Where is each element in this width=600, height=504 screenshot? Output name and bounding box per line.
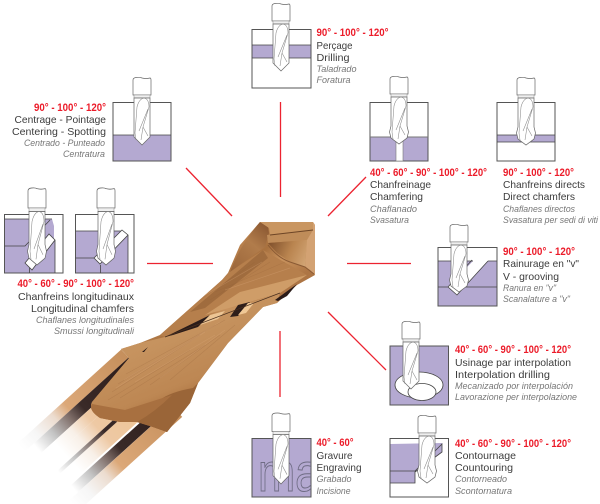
- flute slots: [165, 315, 210, 337]
- longitudinal chamfers text: [18, 278, 135, 337]
- panel: engraving: [252, 413, 362, 503]
- panel: chamfering: [370, 76, 487, 226]
- panel: V-grooving: [438, 224, 579, 306]
- centering text: [12, 102, 106, 160]
- engraving text: 40° - 60°: [316, 437, 354, 449]
- direct chamfers text: 90° - 100° - 120°: [503, 167, 574, 179]
- chamfering text: Svasatura: [370, 215, 409, 226]
- lobe dark underside: [137, 383, 198, 432]
- lower lobe: [91, 293, 280, 432]
- panel: longitudinal chamfers: [4, 188, 135, 337]
- panel: interpolation drilling: [390, 321, 577, 405]
- chamfering text: Chanfreinage: [370, 179, 431, 191]
- chamfering diagram: [370, 76, 428, 161]
- direct chamfers text: Chaflanes directos: [503, 204, 575, 215]
- interpolation text: 40° - 60° - 90° - 100° - 120°: [455, 344, 571, 356]
- direct chamfers text: Direct chamfers: [503, 191, 575, 203]
- V-grooving text: 90° - 100° - 120°: [503, 246, 575, 258]
- head: left lobe: [230, 222, 269, 272]
- countouring text: Countouring: [455, 462, 513, 474]
- longitudinal chamfers text: Chanfreins longitudinaux: [18, 291, 135, 303]
- V-grooving text: [503, 246, 579, 305]
- engraving text: Engraving: [316, 462, 362, 474]
- panel: drilling: [252, 3, 388, 88]
- interpolation text: Usinage par interpolation: [455, 357, 571, 369]
- interpolation text: Mecanizado por interpolación: [455, 381, 573, 392]
- longitudinal chamfer diagram 1: [4, 188, 63, 273]
- head: right rim: [305, 222, 315, 275]
- drilling diagram: [252, 3, 311, 88]
- interpolation diagram: [390, 321, 448, 405]
- drilling text: Perçage: [316, 40, 353, 52]
- red connector lines: [147, 102, 411, 397]
- direct chamfers text: [503, 167, 599, 226]
- countouring text: 40° - 60° - 90° - 100° - 120°: [455, 438, 571, 450]
- countouring text: Contournage: [455, 450, 516, 462]
- direct chamfers diagram: [497, 77, 555, 161]
- interpolation text: Interpolation drilling: [455, 369, 550, 381]
- longitudinal chamfer diagram 2: [76, 188, 134, 273]
- wood-grain streaks: [108, 262, 285, 400]
- countouring text: [455, 438, 571, 497]
- V-grooving diagram: [438, 224, 497, 306]
- drilling text: Drilling: [316, 52, 350, 64]
- drilling text: 90° - 100° - 120°: [316, 27, 388, 39]
- panel: countouring: [390, 415, 571, 497]
- centering text: Centratura: [63, 149, 105, 160]
- V-grooving text: V - grooving: [503, 271, 559, 283]
- longitudinal chamfers text: Longitudinal chamfers: [31, 303, 134, 315]
- head: cutting cup: [268, 240, 307, 267]
- centering diagram: [113, 77, 171, 161]
- shank strips fading out: [21, 354, 177, 504]
- countouring diagram: [390, 415, 448, 497]
- centering text: Centering - Spotting: [12, 126, 106, 138]
- centering text: 90° - 100° - 120°: [34, 102, 106, 114]
- upper flute shading: [160, 250, 307, 337]
- interpolation text: [455, 344, 577, 403]
- drilling text: Taladrado: [316, 64, 356, 75]
- central drill bit photo: [21, 222, 315, 504]
- centering text: Centrage - Pointage: [14, 114, 106, 126]
- chamfering text: Chamfering: [370, 191, 423, 203]
- chamfering text: 40° - 60° - 90° - 100° - 120°: [370, 167, 487, 179]
- engraving text: Grabado: [316, 474, 352, 485]
- engraving text: Gravure: [316, 450, 353, 462]
- engraving diagram: ma: [258, 443, 321, 503]
- longitudinal chamfers text: Chaflanes longitudinales: [36, 315, 134, 326]
- longitudinal chamfers text: 40° - 60° - 90° - 100° - 120°: [18, 278, 134, 290]
- chamfering text: [370, 167, 487, 226]
- V-grooving text: Rainurage en "v": [503, 258, 579, 270]
- main fluted body: [91, 222, 315, 432]
- longitudinal chamfers text: Smussi longitudinali: [54, 326, 135, 337]
- interpolation text: Lavorazione per interpolazione: [455, 392, 577, 403]
- panel: direct chamfers: [497, 77, 599, 226]
- head: lower facet: [267, 230, 313, 243]
- V-grooving text: Ranura en "v": [503, 283, 557, 294]
- engraving text: Incisione: [316, 486, 350, 497]
- head: top facet: [260, 222, 313, 235]
- chamfering text: Chaflanado: [370, 204, 417, 215]
- countouring text: Scontornatura: [455, 486, 512, 497]
- V-grooving text: Scanalature a "v": [503, 294, 571, 305]
- engraving text: [316, 437, 362, 497]
- drilling text: Foratura: [316, 75, 350, 86]
- countouring text: Contorneado: [455, 474, 507, 485]
- direct chamfers text: Chanfreins directs: [503, 179, 585, 191]
- panel: centering: [12, 77, 171, 161]
- centering text: Centrado - Punteado: [24, 138, 105, 149]
- drilling text: [316, 27, 388, 86]
